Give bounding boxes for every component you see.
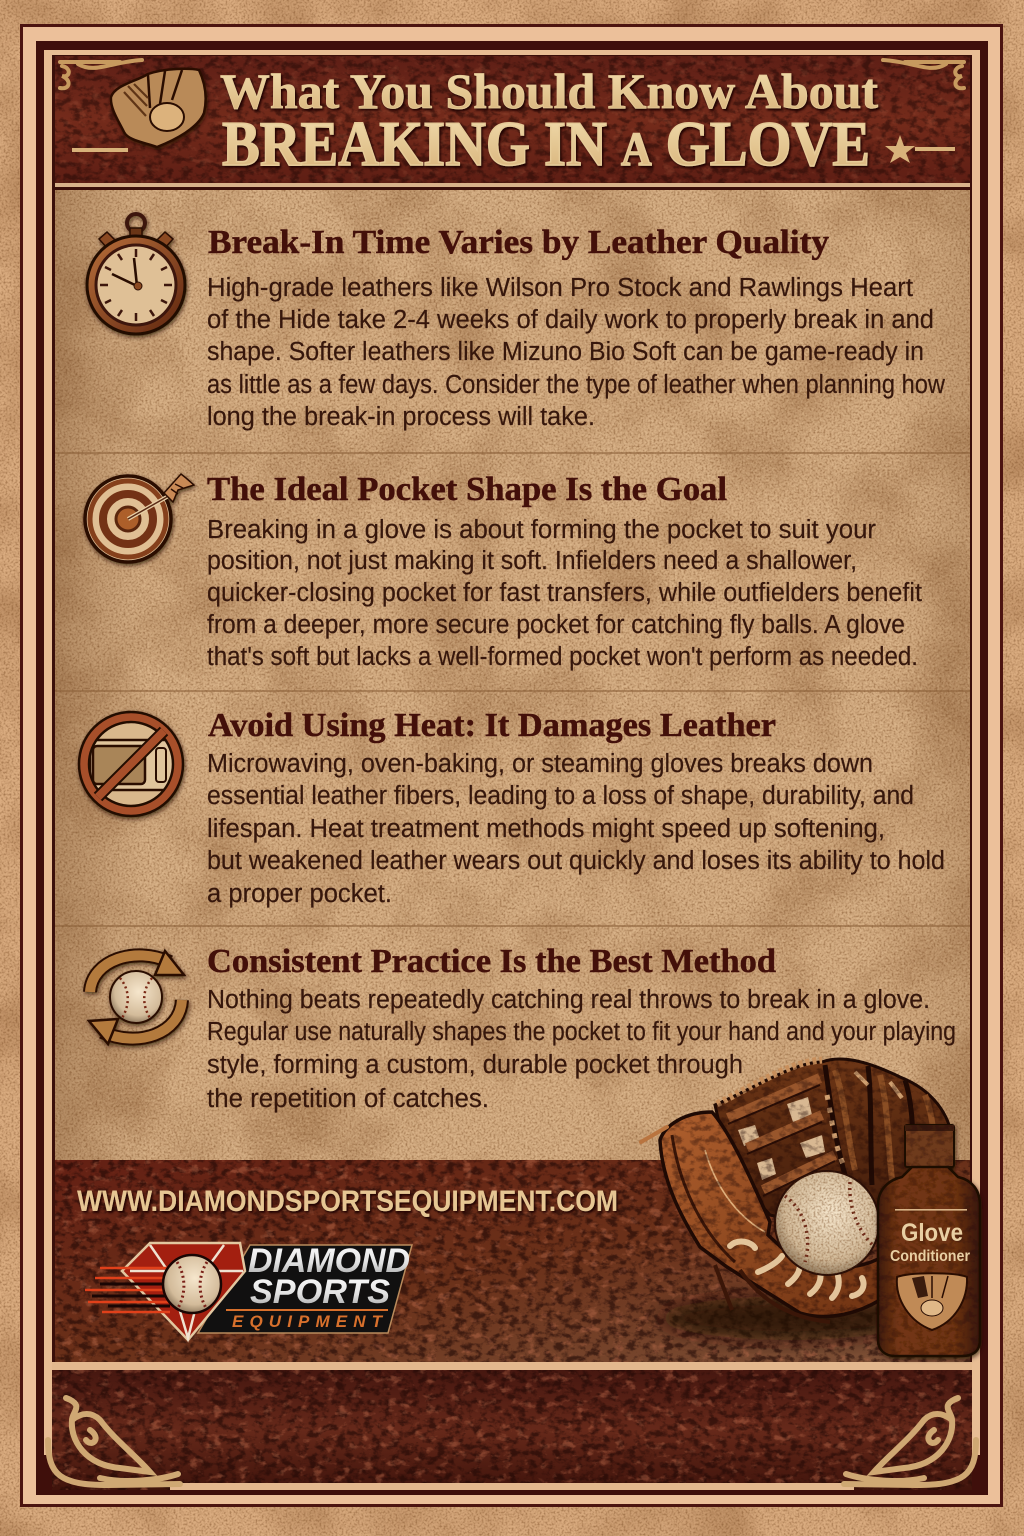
body text: the repetition of catches.	[207, 1085, 489, 1113]
inner border bottom and corner ornaments	[48, 1398, 976, 1490]
body text: Regular use naturally shapes the pocket to fit your hand and your playing	[207, 1018, 956, 1046]
back fingers	[715, 1059, 952, 1240]
corner ornament left	[48, 1398, 180, 1485]
diamond emblem	[122, 1243, 245, 1340]
heading: Consistent Practice Is the Best Method	[207, 943, 776, 980]
heading: The Ideal Pocket Shape Is the Goal	[207, 471, 727, 508]
bottle: glove conditioner	[878, 1125, 980, 1357]
leather grain	[662, 1061, 944, 1315]
body text: Microwaving, oven-baking, or steaming gloves breaks down	[207, 750, 873, 778]
section 4: consistent practice	[89, 943, 956, 1113]
wordmark	[226, 1242, 410, 1331]
body text	[207, 516, 922, 671]
title line 1: What You Should Know About	[220, 63, 878, 119]
wordmark: EQUIPMENT	[232, 1312, 384, 1331]
logo: Diamond Sports Equipment	[85, 1242, 412, 1340]
decorative rule and star	[72, 135, 955, 163]
body text: as little as a few days. Consider the type of leather when planning how	[207, 371, 946, 399]
body text: that's soft but lacks a well-formed pocket won't perform as needed.	[207, 643, 918, 671]
footer ground	[52, 1160, 972, 1490]
body text	[207, 986, 956, 1113]
icon: baseball with cycle arrows	[89, 951, 184, 1044]
body text: shape. Softer leathers like Mizuno Bio Soft can be game-ready in	[207, 338, 924, 366]
body text: of the Hide take 2-4 weeks of daily work to properly break in and	[207, 306, 934, 334]
section separators	[55, 453, 970, 926]
bottle: glove conditioner: Glove	[901, 1219, 963, 1247]
header banner	[55, 56, 970, 190]
decorative corner scrolls	[60, 60, 964, 88]
body text: essential leather fibers, leading to a loss of shape, durability, and	[207, 782, 914, 810]
website url: WWW.DIAMONDSPORTSEQUIPMENT.COM	[77, 1185, 618, 1218]
top lacing	[717, 1060, 822, 1104]
heading: Avoid Using Heat: It Damages Leather	[208, 707, 776, 744]
icon: small glove emblem	[111, 69, 206, 147]
corner ornament right	[844, 1398, 976, 1485]
body text: style, forming a custom, durable pocket through	[207, 1051, 743, 1079]
lace tail	[641, 1127, 667, 1142]
thumb and heel	[660, 1112, 880, 1316]
body text: but weakened leather wears out quickly and loses its ability to hold	[207, 847, 945, 875]
title line 2: BREAKING IN A GLOVE	[222, 108, 870, 179]
speed lines	[85, 1268, 172, 1312]
web straps	[728, 1078, 835, 1190]
icon: stopwatch	[87, 214, 185, 334]
heel lacing	[730, 1242, 864, 1298]
glove	[641, 1050, 960, 1330]
body text: position, not just making it soft. Infielders need a shallower,	[207, 547, 857, 575]
icon: target with arrow	[85, 474, 194, 562]
body text: lifespan. Heat treatment methods might speed up softening,	[207, 815, 885, 843]
body text: long the break-in process will take.	[207, 403, 595, 431]
body text	[207, 274, 946, 431]
baseball	[775, 1170, 879, 1276]
body text: Nothing beats repeatedly catching real throws to break in a glove.	[207, 986, 930, 1014]
wordmark: DIAMOND	[248, 1242, 410, 1280]
illustration: glove, baseball and conditioner	[641, 1050, 980, 1357]
icon: crossed-out microwave	[79, 712, 183, 816]
heading: Break-In Time Varies by Leather Quality	[208, 224, 829, 261]
wordmark: SPORTS	[250, 1273, 390, 1311]
body text	[207, 750, 945, 908]
body text: from a deeper, more secure pocket for catching fly balls. A glove	[207, 611, 905, 639]
section 3: avoid heat	[79, 707, 945, 908]
black name plate	[198, 1245, 412, 1333]
section 2: pocket shape	[85, 471, 922, 671]
parchment panel	[55, 188, 970, 1163]
body text: High-grade leathers like Wilson Pro Stock and Rawlings Heart	[207, 274, 913, 302]
section 1: break-in time	[87, 214, 946, 431]
bottle: glove conditioner: Conditioner	[890, 1248, 970, 1265]
body text: a proper pocket.	[207, 880, 392, 908]
web windows	[738, 1097, 825, 1180]
body text: Breaking in a glove is about forming the pocket to suit your	[207, 516, 876, 544]
baseball	[163, 1255, 221, 1313]
body text: quicker-closing pocket for fast transfers, while outfielders benefit	[207, 579, 922, 607]
